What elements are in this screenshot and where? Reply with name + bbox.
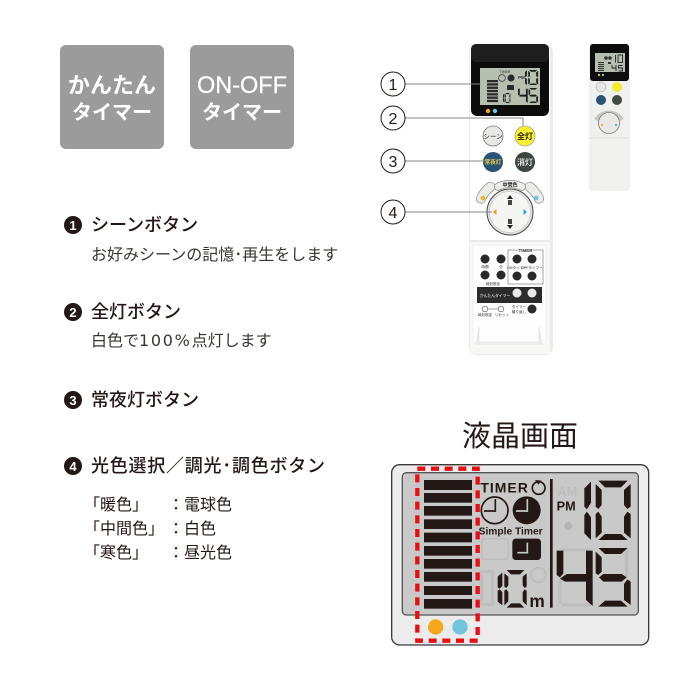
timer badge: simple timer xyxy=(60,45,164,149)
callout ② xyxy=(381,106,523,130)
text block: colour and dimming button: 「寒色」 xyxy=(84,544,148,562)
night light button xyxy=(483,152,503,172)
callout ①: 1 xyxy=(389,77,398,94)
callout ① xyxy=(381,72,481,96)
clock digits 10 xyxy=(584,481,631,540)
timer icons xyxy=(479,479,545,560)
brightness level bars xyxy=(424,480,472,609)
text block: scene button xyxy=(64,215,338,264)
off button xyxy=(515,152,535,172)
timer panel under cover: リセット xyxy=(495,312,510,317)
timer panel under cover: 時間 xyxy=(481,264,489,269)
unlit AM label: AM xyxy=(558,485,577,499)
night light button: 常夜灯 xyxy=(485,158,502,166)
screen xyxy=(402,473,638,615)
device outline xyxy=(392,465,649,645)
timer panel under cover: 繰り返し xyxy=(512,309,527,314)
divider xyxy=(550,479,553,608)
callout ②: 2 xyxy=(389,111,398,128)
remote display head: TIMER xyxy=(500,70,511,74)
off button: 消灯 xyxy=(517,157,533,167)
colour selection dial xyxy=(481,182,539,235)
text block: scene button: 1 xyxy=(69,218,77,233)
timer panel under cover: 分 xyxy=(499,264,503,269)
text block: scene button: シーンボタン xyxy=(91,215,198,235)
text block: night light button: 3 xyxy=(69,393,77,408)
timer badge: on-off timer xyxy=(190,45,294,149)
LCD screen diagram xyxy=(392,465,649,645)
text block: night light button: 常夜灯ボタン xyxy=(91,390,199,410)
unlit segments xyxy=(482,522,627,605)
timer panel under cover: 時刻設定 xyxy=(478,312,493,317)
timer icons: TIMER xyxy=(480,479,529,495)
small remote control, cover closed xyxy=(589,44,630,191)
text block: colour and dimming button: 光色選択／調光･調色ボタン xyxy=(91,456,325,476)
red dashed highlight xyxy=(417,469,478,641)
text block: full light button: 全灯ボタン xyxy=(91,302,181,322)
text block: scene button: お好みシーンの記憶･再生をします xyxy=(91,246,338,264)
text block: colour and dimming button: 「中間色」 xyxy=(84,520,164,538)
remote body xyxy=(469,44,553,355)
timer panel under cover: 時刻設定 xyxy=(486,281,501,286)
timer badge: simple timer: かんたん xyxy=(68,73,156,98)
remote display head xyxy=(471,44,549,116)
callout ③: 3 xyxy=(389,154,398,171)
scene button: シーン xyxy=(483,134,503,140)
callout ④ xyxy=(381,200,492,224)
timer panel under cover xyxy=(470,240,550,354)
callout ④: 4 xyxy=(389,205,398,222)
timer panel under cover: ONタイマー xyxy=(507,265,527,270)
callout ③ xyxy=(381,149,486,173)
text block: colour and dimming button xyxy=(64,456,325,562)
colour indicator dots xyxy=(428,619,468,635)
text block: full light button: 白色で100%点灯します xyxy=(91,331,272,350)
full light button: 全灯 xyxy=(517,131,533,141)
full light button xyxy=(515,126,535,146)
colour selection dial: 中間色 xyxy=(502,182,518,188)
text block: colour and dimming button: 「暖色」 xyxy=(84,496,148,514)
timer panel under cover: タイマー xyxy=(512,304,527,309)
text block: colour and dimming button: ：白色 xyxy=(168,520,216,538)
remote display head: PM xyxy=(518,75,525,80)
timer badge: on-off timer: タイマー xyxy=(202,101,282,124)
text block: full light button xyxy=(64,302,272,350)
timer badge: on-off timer: ON-OFF xyxy=(197,72,287,99)
text block: full light button: 2 xyxy=(69,305,77,320)
timer badge: simple timer: タイマー xyxy=(72,101,152,124)
timer panel under cover: かんたんタイマー xyxy=(480,293,510,298)
text block: colour and dimming button: 4 xyxy=(69,459,77,474)
text block: colour and dimming button: ：昼光色 xyxy=(168,544,232,562)
PM label: PM xyxy=(557,499,576,513)
scene button xyxy=(483,126,503,146)
timer minutes digits 10m: m xyxy=(529,591,545,611)
clock digits 45 xyxy=(557,548,631,607)
timer minutes digits 10m xyxy=(498,570,545,611)
timer panel under cover: TIMER xyxy=(518,248,533,253)
heading: LCD screen: 液晶画面 xyxy=(462,420,578,453)
text block: colour and dimming button: ：電球色 xyxy=(168,496,232,514)
main remote control xyxy=(469,44,553,355)
timer panel under cover: OFFタイマー xyxy=(521,265,543,270)
timer icons: Simple Timer xyxy=(479,526,543,537)
